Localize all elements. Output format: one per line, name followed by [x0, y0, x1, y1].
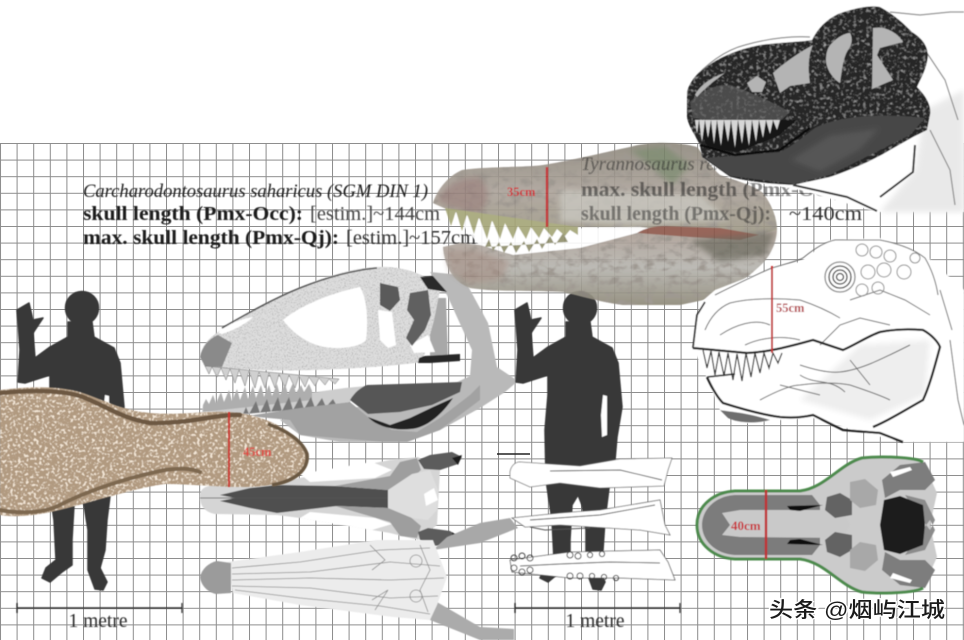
heading: Tyrannosaurus measurements [581, 154, 862, 225]
pale skull roof [388, 470, 438, 520]
carcharodontosaurus top-view skull [200, 452, 462, 546]
mandible light patch [790, 128, 880, 172]
pale mid-jaw patch [560, 190, 730, 225]
skull openings [218, 287, 435, 353]
white panel [693, 238, 964, 442]
lower jaw gray [202, 386, 367, 418]
tyrannosaurus top-view skull with green outline [697, 457, 937, 593]
black skull roof [420, 276, 447, 292]
neck sketch [693, 12, 964, 205]
heading: Carcharodontosaurus measurements: max. skull length (Pmx-Qj): [83, 227, 339, 249]
width label 40cm: 40cm [731, 518, 761, 533]
upper teeth [445, 208, 578, 239]
red height line [771, 266, 773, 353]
human silhouette left [17, 292, 124, 590]
heavy lower jaw outline [707, 377, 903, 442]
mouth backing dark [695, 120, 797, 152]
lower jaw [443, 230, 777, 305]
soft shading [800, 340, 930, 420]
gray mid blobs [825, 493, 852, 557]
white gaps [300, 462, 392, 530]
gray restored jaw and quadrate [280, 272, 518, 442]
rear gray cheeks [905, 495, 935, 555]
line skull dark details [520, 470, 662, 566]
upper jaw [433, 143, 777, 240]
red width line [228, 412, 230, 487]
sketch tyrannosaurus head [693, 238, 964, 442]
heading: Carcharodontosaurus measurements: Carcharodontosaurus saharicus (SGM DIN 1) [83, 181, 428, 202]
neck black strokes [793, 145, 915, 211]
red width line [765, 490, 767, 559]
upper dark ridge [0, 391, 240, 423]
tan top-view dinosaur head [0, 387, 307, 516]
dark skull [687, 6, 930, 185]
dark rear blobs [418, 452, 462, 546]
dark central band [220, 485, 388, 513]
gray chin [720, 410, 770, 422]
second tooth row [243, 397, 337, 414]
gray palate snout [200, 561, 231, 594]
width label 45cm: 45cm [243, 445, 272, 459]
middle line skull [512, 500, 670, 535]
dark gray snout band [702, 495, 820, 555]
pale snout outline [200, 457, 440, 540]
scale bar left: 1 metre [68, 611, 128, 632]
reddish snout tip [437, 178, 488, 212]
upper line skull [510, 458, 672, 488]
heading: Tyrannosaurus measurements: max. skull length (Pmx-Occ) [581, 179, 841, 201]
midline [200, 497, 388, 499]
heavy mouth outline [693, 329, 940, 427]
mandible mid-tone [705, 116, 925, 184]
heading: Carcharodontosaurus measurements: skull length (Pmx-Occ): [83, 203, 303, 225]
upper teeth [205, 366, 339, 388]
dark premaxilla [200, 335, 232, 367]
red mouth lining [637, 226, 760, 243]
dark jaw shadow [690, 232, 775, 262]
green outline [697, 457, 923, 593]
carcharodontosaurus side skull restoration [200, 267, 518, 442]
spinosaur-like photo head [433, 143, 777, 305]
dark orbit region [380, 283, 400, 311]
heading: Carcharodontosaurus measurements: [estim.]~157cm [346, 227, 476, 249]
palate linework [232, 545, 444, 614]
heading: Carcharodontosaurus measurements [83, 181, 476, 249]
tyrannosaurus photo skull panel [687, 0, 964, 212]
white slits [890, 467, 912, 583]
short scale mark [497, 453, 530, 455]
scale bar right: 1 metre [565, 611, 625, 632]
pale skull body [697, 457, 937, 593]
red width line [546, 167, 548, 227]
light gray lobes [850, 479, 878, 571]
gray inner strut [430, 298, 448, 358]
dark temporal region [406, 290, 431, 346]
skull bumps [856, 244, 920, 296]
white panel backing [697, 0, 964, 212]
black mandible sliver [368, 398, 453, 429]
tooth sockets [511, 551, 619, 581]
gray jugal strut upper [433, 518, 518, 550]
dark roof stroke [222, 268, 377, 328]
pale central strip [722, 510, 850, 538]
human silhouette right [515, 292, 622, 590]
lower teeth [485, 233, 568, 253]
gray jugal strut lower [430, 598, 514, 640]
watermark: 头条 @烟屿江城 [769, 599, 945, 622]
palate body [227, 540, 447, 620]
heading: Carcharodontosaurus measurements: [estim.]~144cm [310, 203, 440, 225]
dark mandible block [350, 382, 462, 414]
lower jaw mid gray [247, 385, 480, 442]
sketched teeth [703, 350, 782, 381]
green head patch [630, 146, 690, 185]
heading: Tyrannosaurus measurements: ~140cm [789, 203, 862, 225]
reddish chin [445, 250, 510, 284]
measurement grid [0, 143, 964, 640]
snout mid-tone [690, 85, 790, 130]
gray lateral bones [335, 458, 421, 538]
rear gray lobes [882, 462, 935, 588]
skull openings [695, 28, 903, 97]
mouth gap [450, 210, 700, 256]
lower dark ridge [0, 469, 200, 512]
height label 55cm: 55cm [776, 301, 805, 315]
width label 35cm: 35cm [507, 185, 536, 199]
scale bar right [515, 603, 680, 632]
spiral eye [825, 262, 855, 292]
scale bar left [17, 603, 182, 632]
black slits [787, 505, 823, 545]
dark snout rim [268, 424, 307, 485]
side skull drawing [200, 267, 440, 371]
lower teeth [203, 383, 312, 412]
black central skull [880, 496, 925, 554]
snout outline [693, 302, 735, 377]
heading: Tyrannosaurus measurements: skull length (Pmx-Qj): [581, 203, 771, 225]
tyrannosaurus line-drawing skulls [510, 458, 675, 581]
fine sketch lines [705, 240, 964, 425]
black quadratojugal bar [418, 354, 460, 363]
heading: Tyrannosaurus measurements: Tyrannosaurus rex [581, 154, 724, 175]
jaw line [700, 128, 810, 155]
teeth [695, 120, 780, 148]
lower line skull with tooth row [510, 550, 675, 580]
carcharodontosaurus palate drawing [200, 518, 518, 640]
neck shading [880, 90, 964, 212]
